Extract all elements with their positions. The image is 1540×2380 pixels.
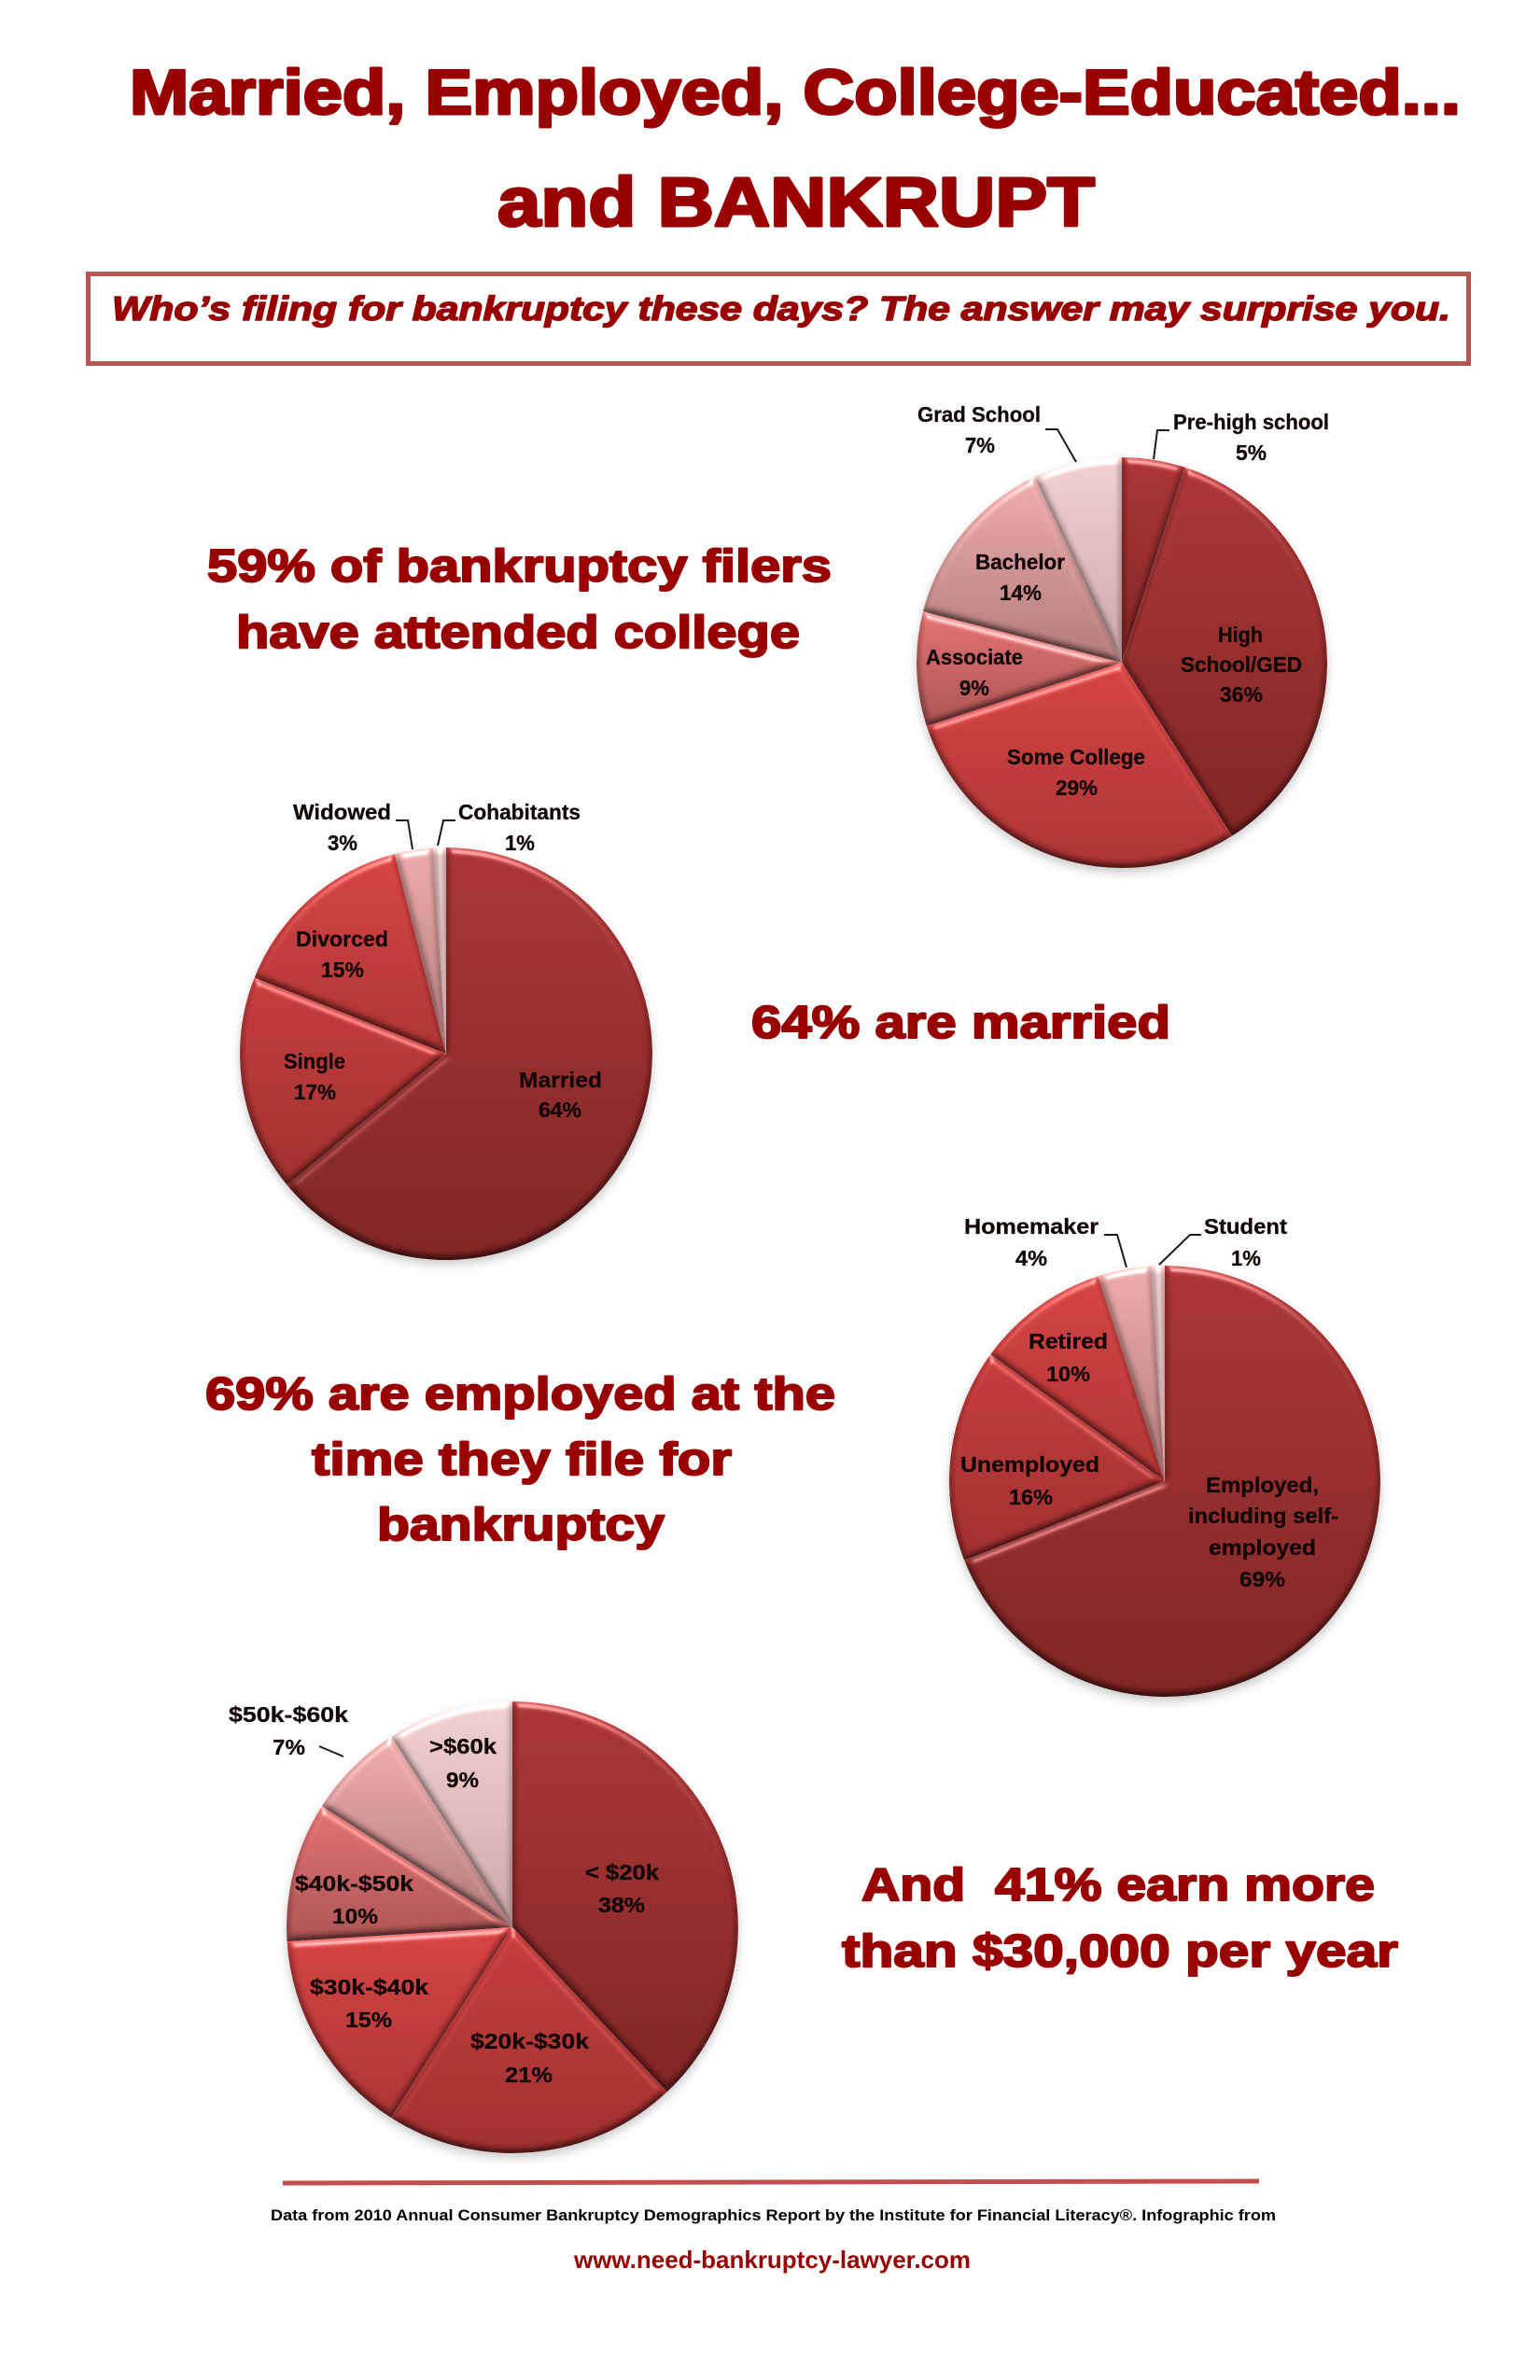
label: >$60k 9%	[429, 1734, 497, 1792]
label: $40k-$50k 10%: $40k-$50k	[295, 1871, 414, 1896]
label: Married 64%	[519, 1068, 602, 1122]
label: Homemaker 4%: Homemaker	[964, 1214, 1099, 1239]
label: High School/GED 36%: 36%	[1220, 682, 1263, 707]
label: High School/GED 36%	[1181, 623, 1302, 707]
label: Unemployed 16%	[960, 1452, 1099, 1509]
pie shadow	[949, 1270, 1380, 1701]
title: Married, Employed, College-Educated...	[130, 57, 1461, 128]
heading: employed: bankruptcy	[377, 1500, 665, 1550]
pie shadow	[287, 1706, 738, 2158]
label: Single 17%: 17%	[294, 1080, 336, 1104]
label: Employed, including self-employed 69%	[1188, 1473, 1338, 1591]
label: $20k-$30k 21%	[470, 2029, 590, 2087]
title: and BANKRUPT	[497, 163, 1095, 241]
label: >$60k 9%: 9%	[446, 1768, 479, 1792]
label: Single 17%	[284, 1049, 345, 1104]
label: Some College 29%: Some College	[1007, 745, 1145, 769]
label: Retired 10%: Retired	[1029, 1329, 1108, 1353]
label: Some College 29%	[1007, 745, 1145, 800]
label: Employed, including self-employed 69%: including self-	[1188, 1504, 1338, 1528]
pie shadow	[240, 852, 652, 1265]
label: $50k-$60k 7%: $50k-$60k	[229, 1702, 349, 1727]
heading: employed	[205, 1369, 835, 1550]
label: $50k-$60k 7%: 7%	[273, 1735, 305, 1759]
label: Homemaker 4%	[964, 1214, 1127, 1270]
heading: income: And 41% earn more	[861, 1860, 1375, 1911]
heading: college: have attended college	[236, 608, 800, 658]
label: $40k-$50k 10%: 10%	[332, 1904, 378, 1928]
label: Bachelor 14%: Bachelor	[975, 550, 1065, 574]
label: Grad School 7%: Grad School	[917, 402, 1041, 427]
slices: employment	[949, 1266, 1380, 1697]
label: Grad School 7%	[917, 402, 1076, 462]
label: < $20k 38%	[585, 1860, 660, 1917]
title	[130, 57, 1461, 241]
slices: education	[917, 457, 1327, 868]
heading: employed: 69% are employed at the	[205, 1369, 835, 1420]
footer rule	[283, 2178, 1259, 2186]
label: Homemaker 4%: 4%	[1015, 1246, 1047, 1270]
heading: income: than $30,000 per year	[842, 1926, 1398, 1977]
label: Pre-high school 5%: 5%	[1236, 441, 1267, 465]
label: Unemployed 16%: 16%	[1009, 1485, 1053, 1509]
label: < $20k 38%: 38%	[598, 1893, 645, 1917]
label: $30k-$40k 15%: $30k-$40k	[310, 1975, 429, 1999]
label: Student 1%: 1%	[1231, 1246, 1261, 1270]
label: $50k-$60k 7%	[229, 1702, 349, 1759]
label: Employed, including self-employed 69%: 69%	[1239, 1567, 1285, 1591]
label: Student 1%	[1159, 1214, 1287, 1270]
label: Unemployed 16%: Unemployed	[960, 1452, 1099, 1477]
label: Widowed 3%: Widowed	[293, 800, 391, 824]
label: Some College 29%: 29%	[1056, 776, 1098, 800]
source note: Data from 2010 Annual Consumer Bankruptcy Demographics Report by the Institute for Financial Literacy®. Infographic from	[271, 2206, 1276, 2224]
pie chart: income	[229, 1701, 738, 2158]
label: Employed, including self-employed 69%: employed	[1209, 1535, 1316, 1560]
label: Cohabitants 1%: Cohabitants	[458, 800, 581, 824]
subtitle box	[88, 274, 1469, 364]
label: High School/GED 36%: School/GED	[1181, 652, 1302, 677]
label: >$60k 9%: >$60k	[429, 1734, 497, 1758]
label: Single 17%: Single	[284, 1049, 345, 1073]
label: Grad School 7%: 7%	[965, 433, 995, 457]
label: Associate 9%: Associate	[926, 645, 1023, 669]
slices: marital status	[240, 847, 652, 1260]
label: Married 64%: 64%	[539, 1098, 581, 1122]
heading: married: 64% are married	[751, 998, 1170, 1048]
pie chart: employment	[949, 1214, 1380, 1701]
label: Retired 10%	[1029, 1329, 1108, 1386]
label: Pre-high school 5%	[1154, 410, 1329, 465]
label: Pre-high school 5%: Pre-high school	[1173, 410, 1329, 434]
label: < $20k 38%: < $20k	[585, 1860, 660, 1884]
label: High School/GED 36%: High	[1218, 623, 1263, 647]
label: Bachelor 14%: 14%	[1000, 581, 1042, 605]
label: Widowed 3%: 3%	[328, 831, 357, 855]
label: $20k-$30k 21%: 21%	[505, 2063, 553, 2087]
label: $30k-$40k 15%: 15%	[345, 2008, 392, 2032]
label: Bachelor 14%	[975, 550, 1065, 605]
label: $20k-$30k 21%: $20k-$30k	[470, 2029, 590, 2053]
subtitle box: Who’s filing for bankruptcy these days? The answer may surprise you.	[112, 289, 1450, 328]
pie chart: marital status	[240, 800, 652, 1265]
label: Married 64%: Married	[519, 1068, 602, 1092]
website link: www.need-bankruptcy-lawyer.com	[573, 2246, 971, 2274]
label: Cohabitants 1%: 1%	[505, 831, 535, 855]
label: Cohabitants 1%	[438, 800, 581, 855]
slices: income	[287, 1701, 738, 2153]
label: $30k-$40k 15%	[310, 1975, 429, 2032]
label: Student 1%: Student	[1204, 1214, 1287, 1239]
label: Associate 9%	[926, 645, 1023, 700]
heading: employed: time they file for	[312, 1435, 732, 1485]
pie chart: education	[917, 402, 1329, 873]
label: Widowed 3%	[293, 800, 413, 855]
heading: college: 59% of bankruptcy filers	[207, 541, 832, 592]
heading: college	[207, 541, 832, 658]
label: $40k-$50k 10%	[295, 1871, 414, 1928]
label: Employed, including self-employed 69%: Employed,	[1206, 1473, 1319, 1497]
heading: income	[842, 1860, 1398, 1977]
label: Divorced 15%: 15%	[321, 958, 364, 982]
label: Divorced 15%: Divorced	[296, 927, 388, 951]
label: Divorced 15%	[296, 927, 388, 982]
label: Retired 10%: 10%	[1046, 1362, 1090, 1386]
label: Associate 9%: 9%	[959, 676, 989, 700]
pie shadow	[917, 462, 1327, 873]
